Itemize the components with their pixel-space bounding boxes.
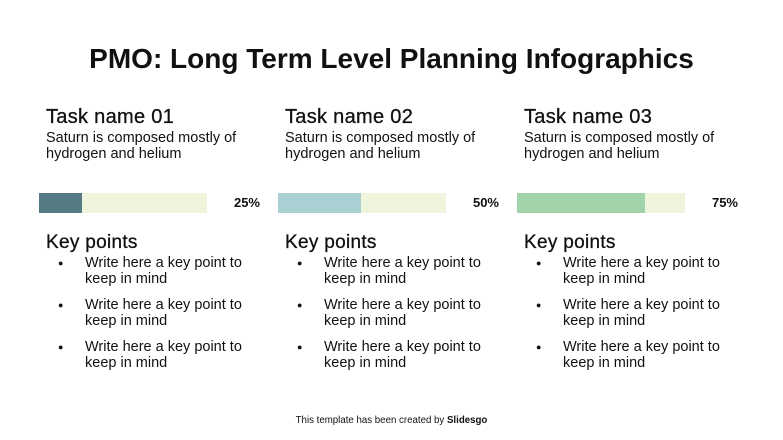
- description: Saturn is composed mostly of: [524, 130, 714, 146]
- key points list: [536, 255, 720, 371]
- key points list: Write here a key point to keep in mind: [85, 339, 242, 371]
- key points list: Write here a key point to keep in mind: [324, 297, 481, 329]
- key points list: Write here a key point to keep in mind: [563, 297, 720, 329]
- panel: task 03: [517, 106, 738, 371]
- description: hydrogen and helium: [285, 146, 420, 162]
- key points list: Write here a key point to keep in mind: [85, 255, 242, 287]
- key points list: Write here a key point to keep in mind: [563, 255, 720, 287]
- task name: Task name 01: [46, 106, 174, 128]
- description: Saturn is composed mostly of: [285, 130, 475, 146]
- description: [285, 130, 476, 162]
- description: Saturn is composed mostly of: [46, 130, 236, 146]
- key points heading: Key points: [46, 232, 138, 253]
- task name: Task name 03: [524, 106, 652, 128]
- task name: Task name 02: [285, 106, 413, 128]
- description: [46, 130, 236, 162]
- panel: task 01: [39, 106, 260, 371]
- key points list: [298, 255, 481, 371]
- description: hydrogen and helium: [524, 146, 659, 162]
- progress bar: [278, 193, 446, 213]
- percentage: 25%: [234, 195, 260, 210]
- panel: task 02: [278, 106, 499, 371]
- key points list: Write here a key point to keep in mind: [85, 297, 242, 329]
- progress bar: [517, 193, 685, 213]
- percentage: 75%: [712, 195, 738, 210]
- title: PMO: Long Term Level Planning Infographics: [89, 43, 694, 74]
- percentage: 50%: [473, 195, 499, 210]
- key points list: [58, 255, 242, 371]
- description: hydrogen and helium: [46, 146, 181, 162]
- key points list: Write here a key point to keep in mind: [324, 255, 481, 287]
- key points list: Write here a key point to keep in mind: [324, 339, 481, 371]
- description: [524, 130, 714, 162]
- key points heading: Key points: [524, 232, 616, 253]
- progress bar: [39, 193, 207, 213]
- key points heading: Key points: [285, 232, 377, 253]
- footer: This template has been created by Slidesgo: [296, 415, 487, 426]
- key points list: Write here a key point to keep in mind: [563, 339, 720, 371]
